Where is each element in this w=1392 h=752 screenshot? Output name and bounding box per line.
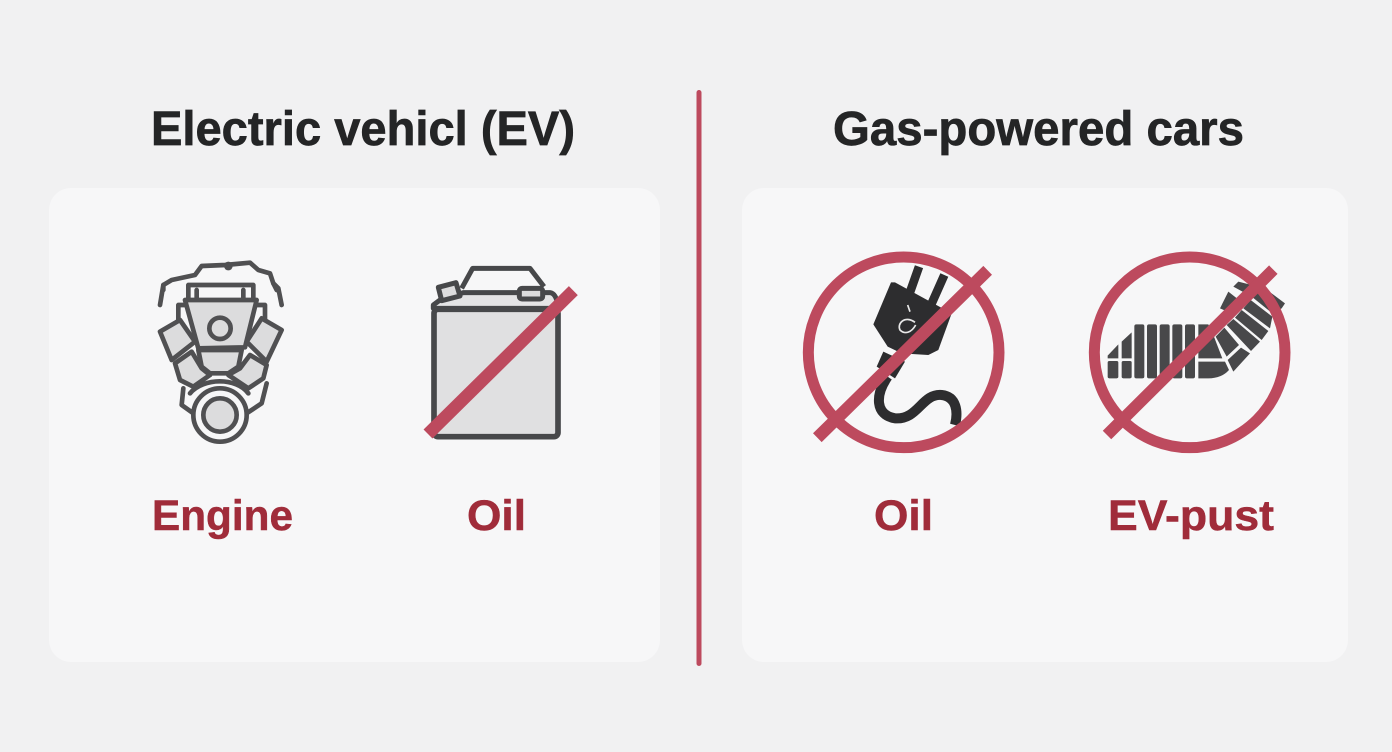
- icon: engine: [160, 262, 282, 442]
- heading: gas-powered cars: Gas-powered cars: [833, 103, 1244, 156]
- icon: crossed-out plug: [808, 257, 999, 448]
- centre divider line: [696, 90, 702, 666]
- slash: [817, 270, 988, 438]
- label: engine: Engine: [152, 492, 293, 540]
- label: oil right: Oil: [874, 492, 933, 540]
- slash: [1107, 270, 1273, 435]
- panel: electric vehicle: [49, 188, 660, 662]
- panel: gas-powered cars: [742, 188, 1348, 662]
- label: oil left: Oil: [467, 492, 526, 540]
- label: EV-pust: EV-pust: [1108, 492, 1274, 540]
- icon: crossed-out oil can: [428, 268, 573, 437]
- icon: crossed-out hose: [1094, 257, 1285, 448]
- slash: [428, 291, 573, 434]
- heading: electric vehicle: Electric vehicl (EV): [151, 103, 575, 156]
